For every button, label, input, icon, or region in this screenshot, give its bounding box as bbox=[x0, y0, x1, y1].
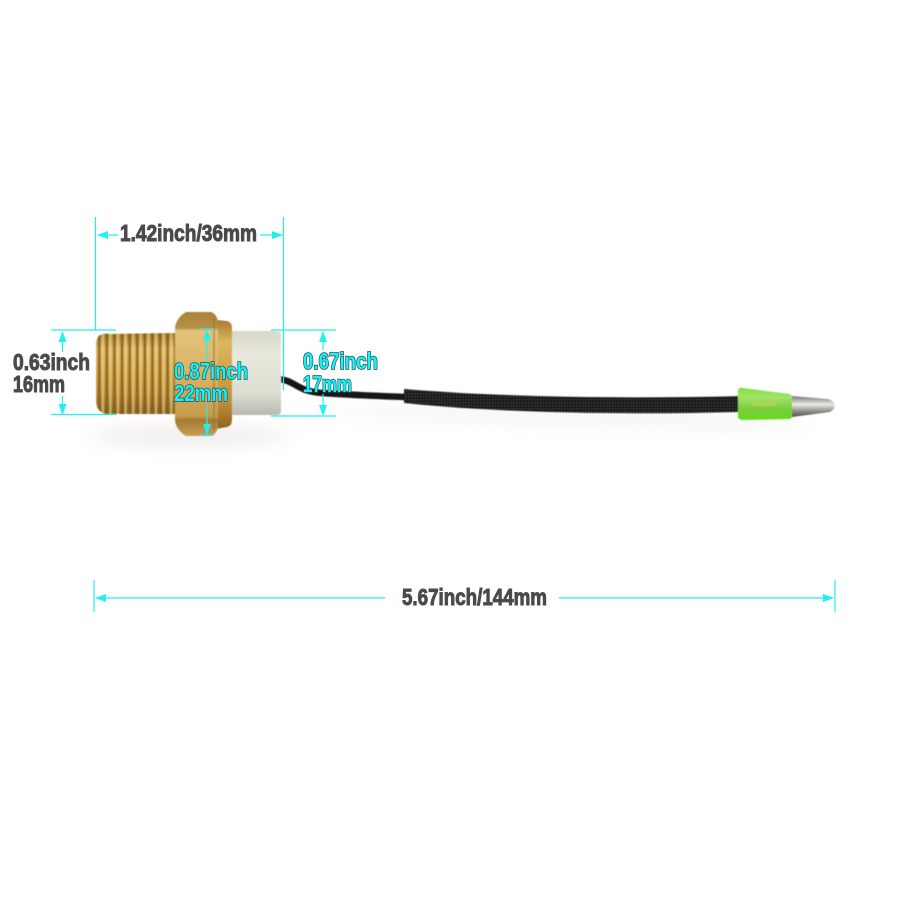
label: 0.87inch 22mm: 0.87inch bbox=[174, 358, 248, 384]
metal terminal bbox=[792, 396, 835, 417]
dimension: insulator diameter bbox=[271, 330, 378, 416]
label: 0.63inch 16mm: 16mm bbox=[13, 371, 65, 397]
wire bbox=[279, 379, 406, 397]
green connector bbox=[738, 388, 792, 420]
threaded brass section bbox=[96, 333, 176, 414]
dimension: total length bbox=[94, 580, 835, 612]
dimension: hex nut size bbox=[174, 329, 248, 435]
dimension: overall thread-to-body width bbox=[96, 217, 284, 390]
label: 1.42inch/36mm: 1.42inch/36mm bbox=[120, 220, 257, 246]
label: 0.63inch 16mm: 0.63inch bbox=[13, 349, 90, 375]
label: 5.67inch/144mm: 5.67inch/144mm bbox=[402, 584, 547, 610]
label: 0.87inch 22mm: 22mm bbox=[174, 380, 228, 406]
white insulator body bbox=[231, 331, 281, 415]
label: 0.67inch 17mm: 0.67inch bbox=[303, 348, 378, 374]
brass collar bbox=[216, 320, 232, 429]
braided sleeve bbox=[404, 389, 742, 413]
brass hex nut bbox=[175, 312, 218, 436]
sensor photo bbox=[96, 312, 835, 436]
label: 0.67inch 17mm: 17mm bbox=[303, 371, 352, 397]
product shadow bbox=[90, 408, 830, 442]
dimension: thread diameter bbox=[13, 330, 116, 415]
